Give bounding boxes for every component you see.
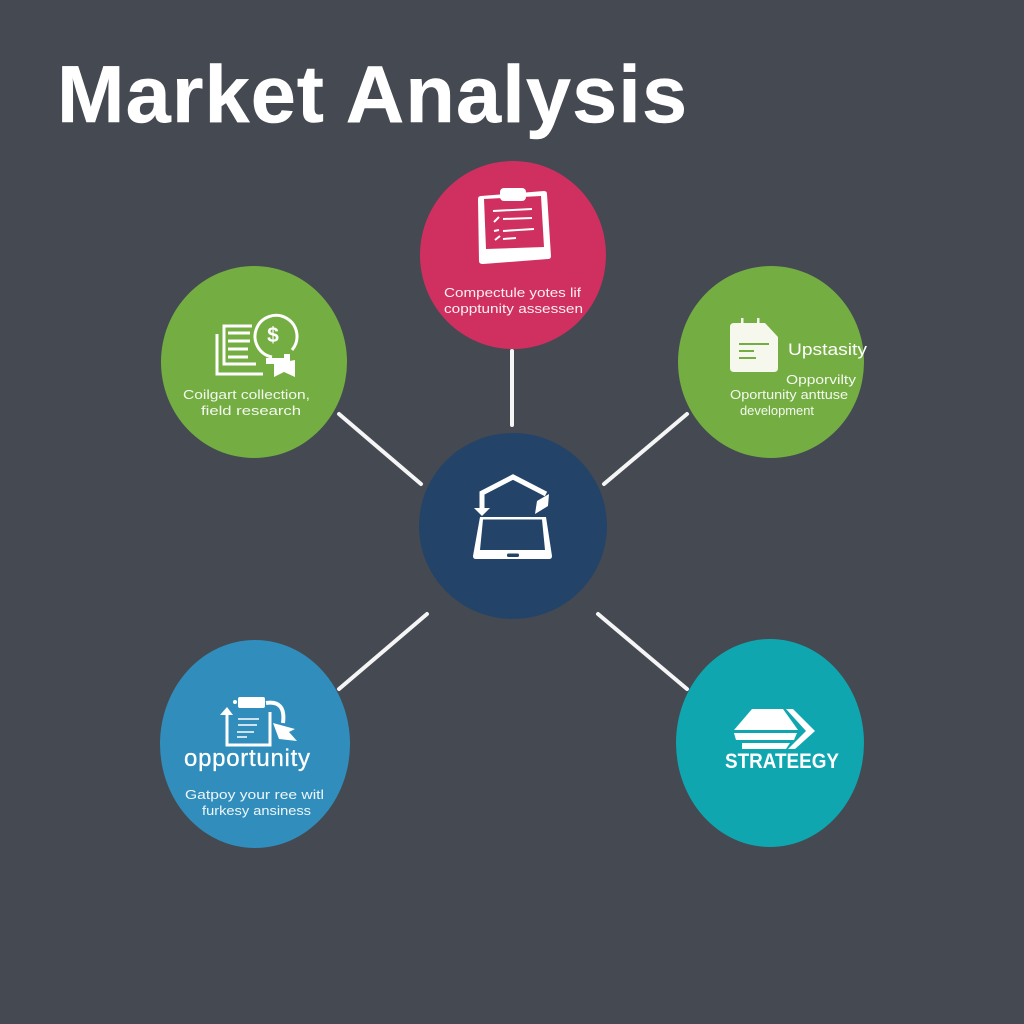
connector lines <box>339 351 687 689</box>
text: right node heading: Upstasity <box>788 340 868 359</box>
text: top node caption: Compectule yotes lif <box>444 285 581 300</box>
text: right node caption <box>730 372 857 418</box>
title: Market Analysis <box>57 50 687 140</box>
text: lower left caption: furkesy ansiness <box>202 803 312 818</box>
icon: layered arrow <box>734 709 815 749</box>
panel: right upstasity node <box>678 266 868 458</box>
text: left node caption <box>183 387 310 418</box>
text: right node caption: development <box>740 403 814 418</box>
text: strategy heading: STRATEEGY <box>725 750 839 773</box>
text: top node caption <box>444 285 583 316</box>
text: left node caption: field research <box>201 403 301 418</box>
text: dollar sign: $ <box>267 324 279 347</box>
panel: lower right strategy node <box>676 639 864 847</box>
text: top node caption: copptunity assessen <box>444 301 583 316</box>
text: right node caption: Oportunity anttuse <box>730 387 848 402</box>
text: lower left heading: opportunity <box>184 745 310 772</box>
text: lower left caption: Gatpoy your ree witl <box>185 787 324 802</box>
icon: notepad <box>730 318 778 372</box>
panel: center hub <box>419 433 607 619</box>
icon: tablet with arrows <box>473 477 552 559</box>
panel: top research node <box>420 161 606 349</box>
icon: clipboard <box>478 188 551 264</box>
panel: left data collection node <box>161 266 347 458</box>
text: left node caption: Coilgart collection, <box>183 387 310 402</box>
text: lower left caption <box>185 787 324 818</box>
text: right node caption: Opporvilty <box>786 372 857 387</box>
panel: lower left opportunity node <box>160 640 350 848</box>
icon: documents and dollar coin <box>217 315 297 377</box>
icon: document with arrows <box>220 697 297 745</box>
